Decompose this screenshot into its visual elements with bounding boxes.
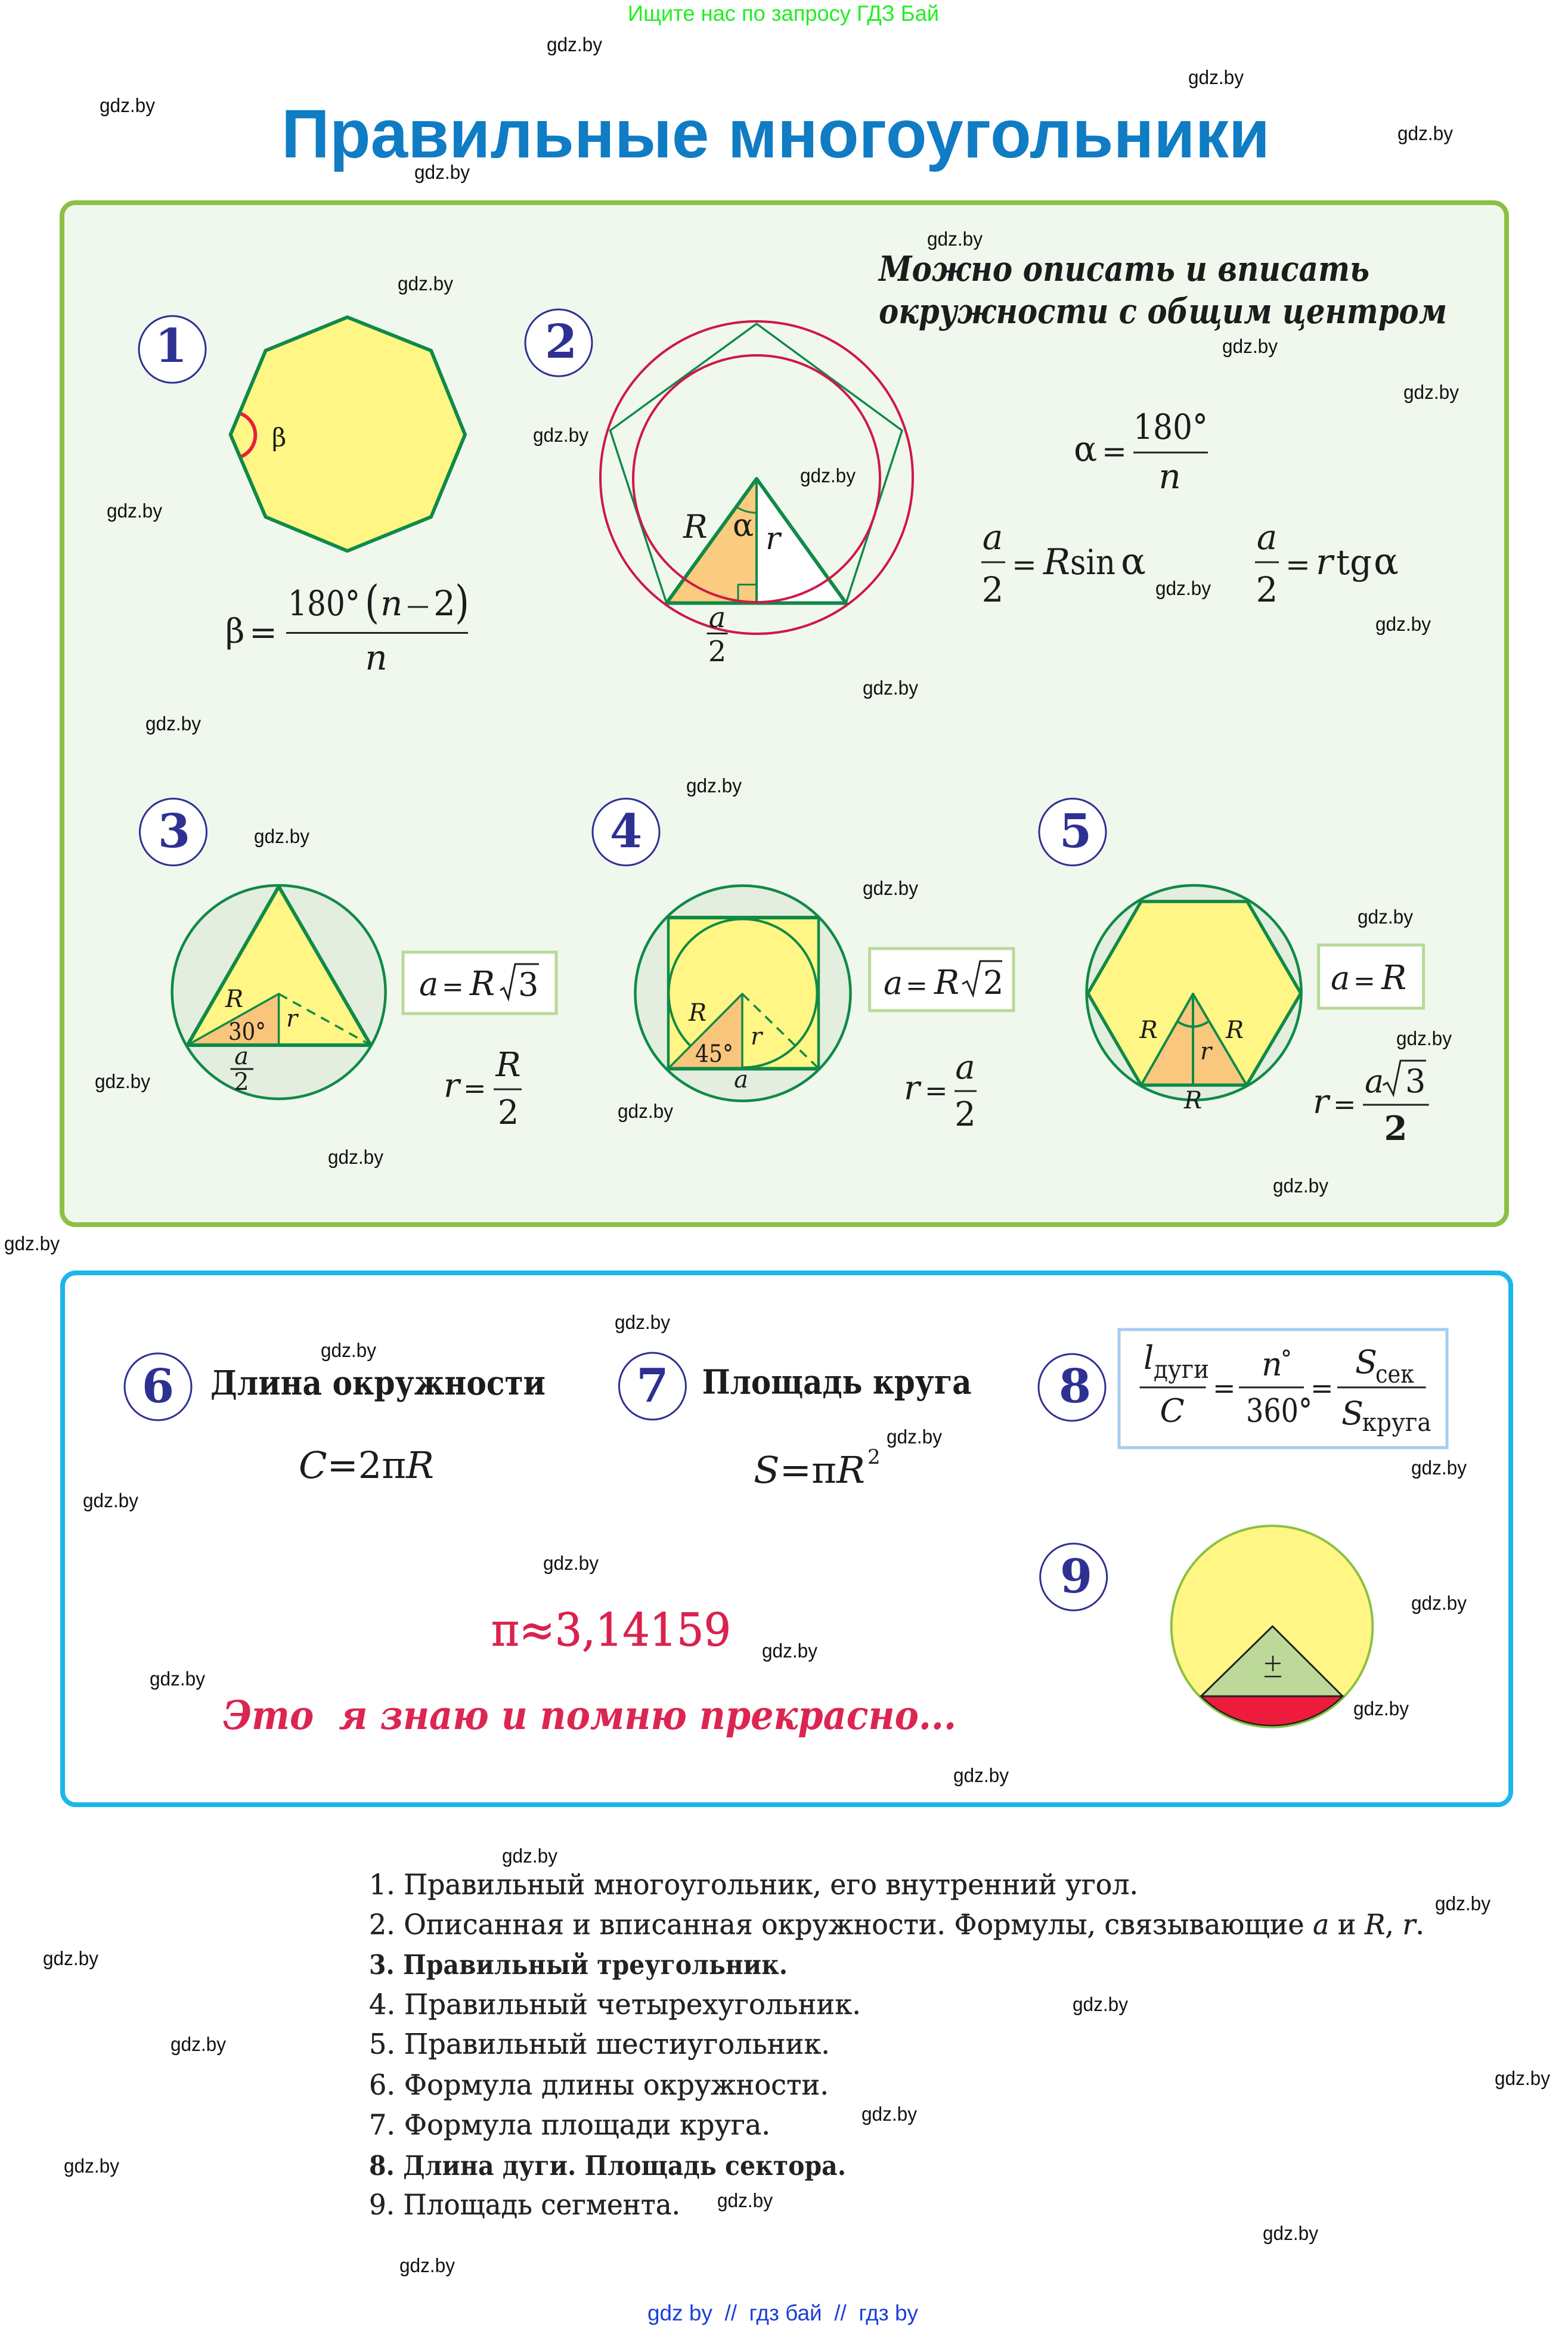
hexagon in circle: R [1225,1017,1244,1044]
box: arc and sector ratio: 360° [1246,1392,1312,1430]
box: a = R [1319,945,1424,1008]
formula: alpha [1074,407,1208,497]
formula: r = a root 3 / 2: 2 [1384,1109,1407,1148]
formula: r = a root 3 / 2: a [1365,1062,1384,1100]
title: Правильные многоугольники [281,96,1270,172]
formula: alpha: n [1158,456,1181,497]
box: arc and sector ratio: дуги [1154,1355,1209,1384]
box: a = R root 3 [403,952,556,1014]
watermarks: gdz.by [43,1947,98,1969]
badge 7 [619,1353,686,1420]
badge 9 [1040,1544,1107,1610]
formula: r = a root 3 / 2: r [1313,1083,1331,1121]
formula: a/2 = r tg alpha: = [1285,547,1310,582]
formula: interior angle: n [365,637,388,678]
box: arc and sector ratio [1119,1330,1447,1448]
formula: r = R/2: R [495,1046,521,1085]
formula: interior angle: n [380,583,402,624]
badge 4 [593,799,659,866]
badge 7: 7 [636,1359,669,1413]
watermarks: gdz.by [927,228,983,250]
watermarks: gdz.by [398,272,453,295]
slogan: Это я знаю и помню прекрасно... [223,1692,956,1739]
watermarks: gdz.by [1403,381,1459,403]
watermarks: gdz.by [547,33,602,55]
topic list: 9. Площадь сегмента. [369,2189,680,2221]
square in circle: 45° [695,1040,733,1068]
formula: r = a/2 [904,1048,977,1134]
badge 6 [125,1353,191,1420]
formula: r = R/2: 2 [498,1093,519,1132]
formula: alpha: 180° [1133,407,1208,447]
box: arc and sector ratio: ° [1281,1346,1292,1372]
formula: a/2 = R sin alpha: a [983,517,1003,557]
formula: r = a/2: r [904,1069,922,1108]
hexagon in circle: R [1139,1017,1158,1044]
watermarks: gdz.by [100,94,155,116]
watermarks: gdz.by [1435,1892,1490,1914]
formula: a/2 = r tg alpha: a [1257,517,1277,557]
watermarks: gdz.by [863,877,918,899]
topic list: 5. Правильный шестиугольник. [369,2028,830,2061]
box: a = R: R [1381,959,1406,997]
box: a = R root 2 [870,949,1014,1011]
note: common centre: Можно описать и вписать [878,249,1369,289]
heading: circumference: Длина окружности [210,1364,546,1403]
note: common centre [878,249,1447,331]
badge 8 [1039,1354,1105,1421]
watermarks: gdz.by [1188,66,1244,88]
badge 5: 5 [1059,804,1092,859]
watermarks: gdz.by [686,774,742,797]
formula: circumference: C=2πR [299,1443,434,1487]
watermarks: gdz.by [1495,2067,1550,2089]
formula: r = R/2: r [444,1067,461,1105]
panel: circle [63,1273,1511,1805]
triangle in circle: r [286,1005,299,1033]
badge 1: 1 [155,319,187,373]
note: common centre: окружности с общим центром [879,291,1447,331]
watermarks: gdz.by [1411,1592,1467,1614]
watermarks: gdz.by [618,1100,673,1122]
box: a = R root 2: R [934,963,959,1002]
topic list: 7. Формула площади круга. [369,2109,770,2142]
badge 3 [140,799,206,866]
badge 4: 4 [610,804,642,859]
watermarks: gdz.by [64,2155,119,2177]
box: a = R root 2: a [884,964,903,1002]
watermarks: gdz.by [95,1070,150,1092]
hexagon in circle: R [1183,1087,1202,1114]
topic list: 2. Описанная и вписанная окружности. Формулы, связывающие a и R, r. [369,1908,1424,1941]
formula: area of circle: S=πR [754,1448,865,1492]
box: a = R root 2: = [906,971,928,1001]
watermarks: gdz.by [1375,613,1431,635]
badge 3: 3 [158,804,190,859]
octagon with angle beta [231,317,465,551]
triangle in circle [172,885,386,1099]
formula: r = a root 3 / 2: 3 [1405,1062,1426,1100]
watermarks: gdz.by [1073,1993,1128,2015]
formula: a/2 = r tg alpha: 2 [1256,569,1278,610]
pentagon with inscribed and circumscribed circles: r [766,521,782,557]
watermarks: gdz.by [171,2033,226,2055]
badge 9: 9 [1060,1550,1092,1604]
heading: area of circle: Площадь круга [702,1363,972,1402]
watermarks: gdz.by [1353,1697,1409,1719]
topic list: 8. Длина дуги. Площадь сектора. [369,2150,846,2182]
box: a = R root 3: R [469,965,495,1003]
watermarks: gdz.by [1273,1175,1328,1197]
formula: alpha: = [1102,434,1127,469]
pentagon with inscribed and circumscribed circles: a [709,601,726,634]
watermarks: gdz.by [862,2103,917,2125]
watermarks: gdz.by [953,1764,1009,1786]
watermarks: gdz.by [254,825,309,847]
watermarks: gdz.by [762,1640,817,1662]
watermarks: gdz.by [1411,1457,1467,1479]
formula: r = R/2: = [463,1072,486,1104]
formula: r = a/2: a [955,1048,975,1087]
topic list [369,1869,1424,2221]
box: a = R root 3: a [419,965,438,1003]
bottom link caption: gdz by // гдз бай // гдз by [647,2301,918,2325]
pentagon with inscribed and circumscribed circles: R [683,508,708,546]
watermarks: gdz.by [107,500,162,522]
formula: a/2 = R sin alpha: sin [1070,542,1115,582]
box: arc and sector ratio: = [1213,1372,1236,1404]
formula: a/2 = r tg alpha: r [1316,541,1335,583]
triangle in circle: 30° [228,1018,266,1046]
formula: interior angle: 2 [433,583,455,624]
pentagon with inscribed and circumscribed circles: α [733,508,754,544]
watermarks: gdz.by [1397,122,1453,144]
formula: interior angle: ( [365,575,379,628]
badge 8: 8 [1059,1359,1091,1414]
formula: r = a/2: 2 [955,1095,976,1134]
box: arc and sector ratio: = [1310,1372,1334,1404]
pi value: π≈3,14159 [491,1603,731,1656]
formula: alpha: α [1074,429,1097,469]
formula: a/2 = r tg alpha [1255,517,1399,610]
box: a = R root 3: 3 [518,966,538,1003]
formula: interior angle: 180° [288,583,360,624]
square in circle: a [734,1066,748,1093]
formula: interior angle: ) [455,575,469,628]
formula: r = a root 3 / 2 [1313,1061,1429,1148]
watermarks: gdz.by [399,2254,455,2276]
box: arc and sector ratio: n [1262,1346,1282,1383]
pentagon with inscribed and circumscribed circles [600,321,913,668]
box: arc and sector ratio: сек [1375,1359,1414,1389]
formula: r = R/2 [444,1046,522,1132]
watermarks: gdz.by [533,424,588,446]
watermarks: gdz.by [1222,335,1278,357]
circle with sector and segment [1172,1526,1372,1727]
watermarks: gdz.by [414,161,470,183]
hexagon in circle: r [1200,1038,1213,1065]
box: a = R root 3: = [442,972,464,1002]
triangle in circle: 2 [234,1068,249,1096]
formula: a/2 = R sin alpha: R [1043,541,1070,583]
formula: interior angle [225,575,469,678]
box: arc and sector ratio: круга [1362,1408,1431,1437]
watermarks: gdz.by [145,712,201,735]
formula: a/2 = R sin alpha: 2 [982,569,1003,610]
watermarks: gdz.by [543,1552,599,1574]
square in circle [636,886,850,1101]
topic list: 4. Правильный четырехугольник. [369,1988,861,2021]
square in circle: R [688,999,706,1027]
topic list: 3. Правильный треугольник. [369,1949,788,1981]
topic list: 6. Формула длины окружности. [369,2069,829,2102]
box: a = R: a [1331,959,1350,997]
watermarks: gdz.by [328,1146,383,1168]
formula: a/2 = R sin alpha: α [1121,540,1146,583]
formula: area of circle: 2 [867,1445,881,1469]
watermarks: gdz.by [800,464,856,487]
watermarks: gdz.by [83,1489,138,1511]
badge 2: 2 [545,315,577,369]
box: arc and sector ratio: C [1160,1392,1185,1430]
octagon with angle beta: β [272,423,286,452]
watermarks: gdz.by [1155,577,1211,599]
triangle in circle: a [234,1043,249,1070]
formula: r = a/2: = [925,1074,948,1107]
top search caption: Ищите нас по запросу ГДЗ Бай [628,1,939,26]
box: arc and sector ratio: S [1355,1343,1377,1381]
watermarks: gdz.by [321,1339,376,1361]
box: a = R: = [1353,966,1375,996]
watermarks: gdz.by [863,677,918,699]
triangle in circle: R [225,986,243,1013]
formula: a/2 = R sin alpha [981,517,1146,610]
badge 1 [139,316,206,383]
formula: interior angle: = [249,614,277,652]
pentagon with inscribed and circumscribed circles: 2 [708,635,726,668]
watermarks: gdz.by [502,1845,557,1867]
watermarks: gdz.by [887,1426,942,1448]
box: arc and sector ratio: l [1144,1339,1154,1377]
badge 2 [525,309,592,376]
formula: interior angle: β [225,612,244,651]
watermarks: gdz.by [1396,1027,1452,1049]
box: arc and sector ratio: S [1341,1395,1364,1432]
watermarks: gdz.by [717,2189,773,2211]
watermarks: gdz.by [1358,906,1413,928]
badge 5 [1039,799,1106,866]
badge 6: 6 [142,1359,174,1414]
watermarks: gdz.by [150,1668,205,1690]
watermarks: gdz.by [1263,2222,1318,2244]
hexagon in circle [1087,885,1301,1114]
watermarks: gdz.by [4,1232,60,1254]
formula: a/2 = R sin alpha: = [1012,547,1037,582]
topic list: 1. Правильный многоугольник, его внутренний угол. [369,1869,1138,1901]
watermarks: gdz.by [615,1311,670,1333]
square in circle: r [751,1023,764,1051]
box: a = R root 2: 2 [983,964,1003,1002]
formula: r = a root 3 / 2: = [1333,1088,1356,1120]
panel: regular polygons [62,203,1507,1225]
formula: a/2 = r tg alpha: α [1374,540,1399,583]
formula: a/2 = r tg alpha: tg [1336,542,1372,582]
